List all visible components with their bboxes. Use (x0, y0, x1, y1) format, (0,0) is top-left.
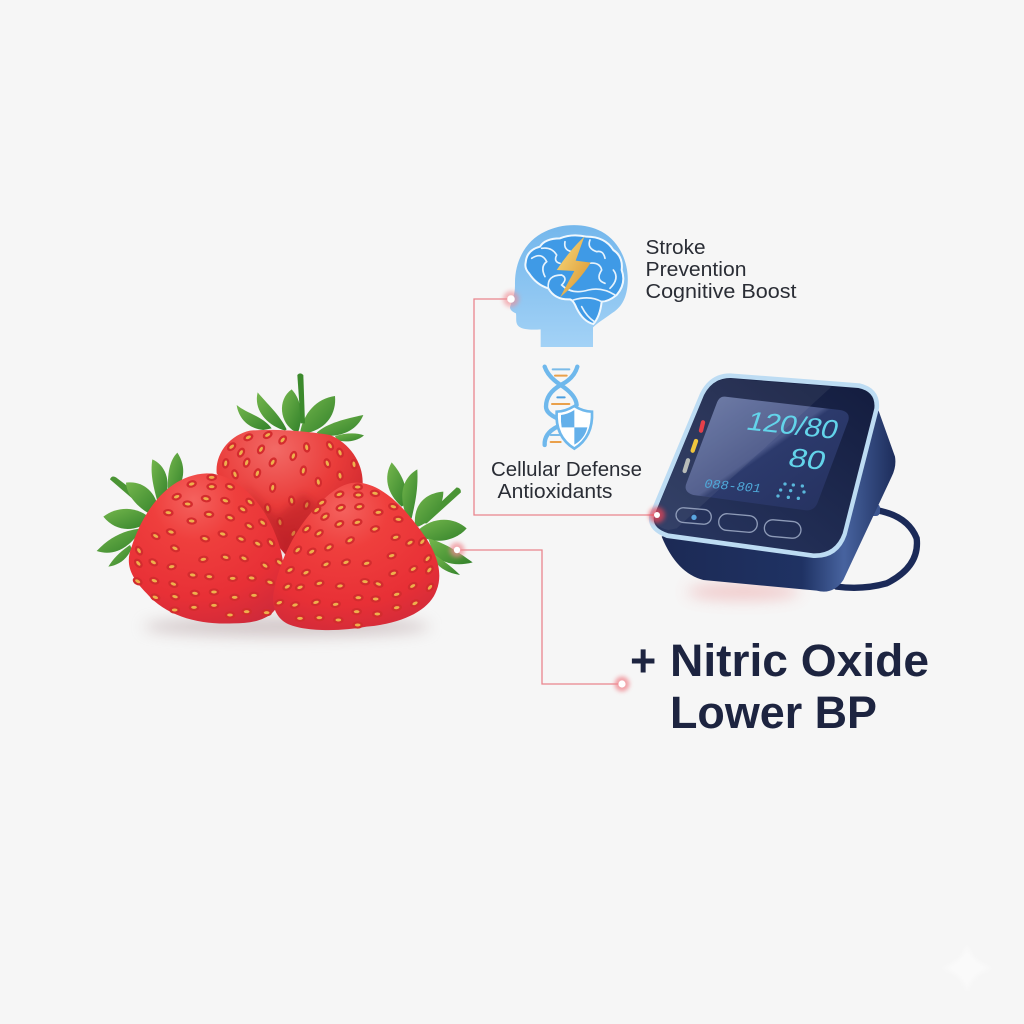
top strawberry seeds (221, 429, 359, 540)
brain folds (532, 240, 616, 322)
text: nitric oxide, lower BP: Nitric Oxide (670, 635, 929, 686)
left strawberry body (129, 473, 284, 624)
connector: strawberries to nitric oxide (450, 542, 622, 684)
top strawberry body (217, 430, 363, 560)
icon: head with brain and lightning bolt (510, 225, 628, 347)
node: nitric oxide (614, 676, 630, 692)
text: stroke prevention and cognitive boost (646, 237, 797, 303)
icon: DNA helix with shield (545, 367, 592, 449)
face glare (655, 379, 832, 530)
icon: sparkle watermark (942, 944, 992, 992)
left strawberry seeds (131, 474, 286, 619)
top strawberry leaves (237, 373, 364, 441)
screen (686, 397, 849, 510)
cable connector (860, 504, 880, 516)
node: brain (503, 291, 519, 307)
shield (557, 406, 592, 449)
node: strawberry (450, 542, 464, 558)
monitor glow shadow (687, 584, 800, 600)
right strawberry seeds (273, 483, 436, 629)
display readings (702, 406, 843, 496)
text: nitric oxide, lower BP: + (630, 635, 656, 686)
connector: brain to monitor (474, 291, 657, 515)
head silhouette (510, 225, 628, 347)
lightning bolt (557, 237, 591, 297)
text: cellular defense and antioxidants: Antioxidants (498, 481, 612, 503)
brain (525, 235, 623, 324)
status lights (685, 422, 703, 471)
text: stroke prevention and cognitive boost: Stroke (646, 237, 706, 259)
display readings: 120/80 (743, 406, 843, 445)
text: stroke prevention and cognitive boost: Cognitive Boost (646, 281, 797, 303)
display readings: 80 (785, 443, 830, 476)
monitor body side (662, 410, 895, 592)
right strawberry body (273, 483, 439, 630)
text: stroke prevention and cognitive boost: Prevention (646, 259, 746, 281)
button dot (691, 515, 697, 520)
node: monitor (649, 507, 665, 523)
crease shadow between strawberries (243, 483, 320, 557)
monitor front face (654, 378, 874, 553)
monitor front bezel (649, 373, 879, 558)
DNA rungs (551, 369, 569, 442)
text: nitric oxide, lower BP: Lower BP (670, 687, 877, 738)
text: nitric oxide, lower BP (630, 635, 929, 738)
text: cellular defense and antioxidants (491, 459, 642, 503)
buttons (675, 507, 802, 539)
right strawberry leaves (387, 462, 473, 575)
DNA strands (545, 367, 577, 445)
icon: strawberries (97, 373, 473, 637)
ground shadow (143, 617, 430, 637)
icon: blood pressure monitor (649, 373, 917, 600)
text: cellular defense and antioxidants: Cellular Defense (491, 459, 642, 481)
display readings: 088-801 (702, 477, 763, 496)
left strawberry leaves (97, 453, 183, 567)
cable (837, 509, 917, 588)
display dots (776, 482, 806, 500)
